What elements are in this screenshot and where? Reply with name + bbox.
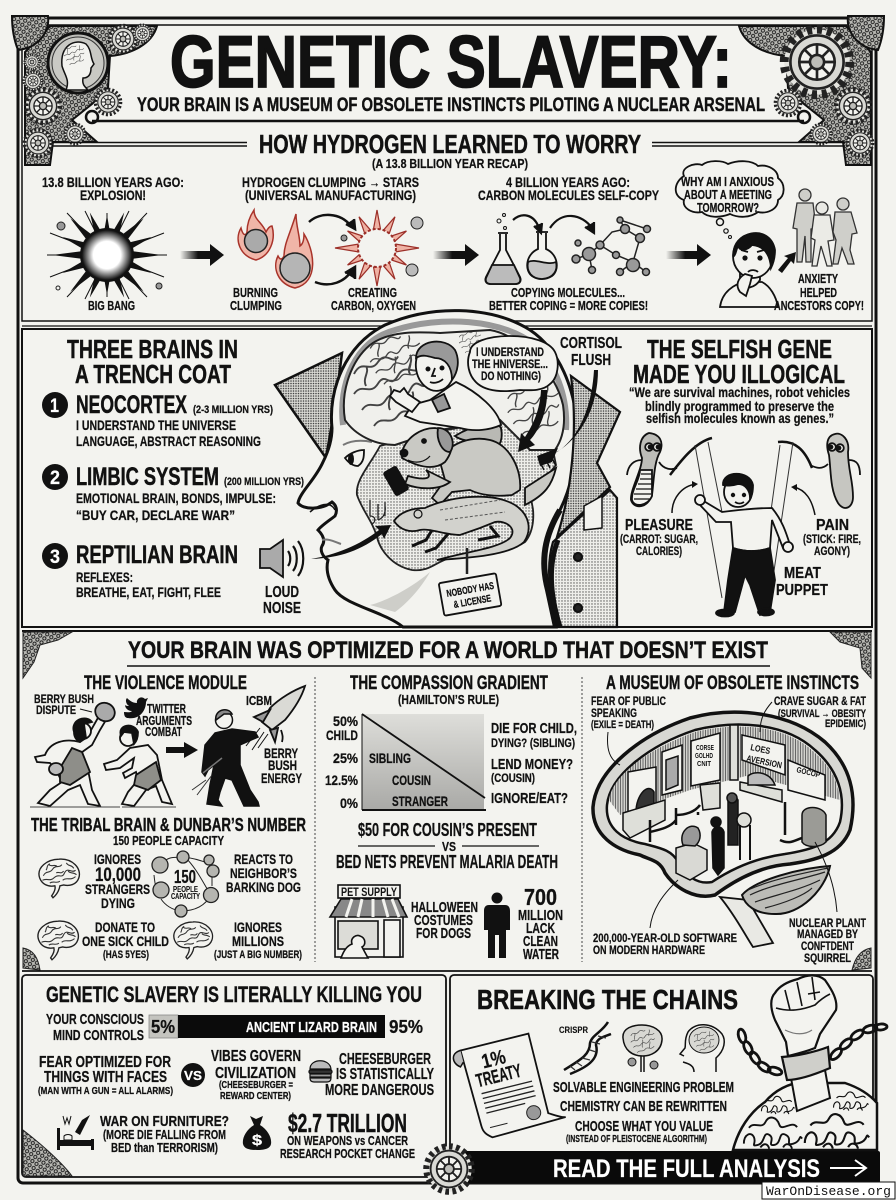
label: cortisol flush: CORTISOL	[560, 335, 622, 352]
exhibits	[623, 725, 826, 880]
label: pleasure: (CARROT: SUGAR,	[620, 532, 698, 546]
icon: molecule	[572, 217, 650, 276]
label: fear of public speaking: FEAR OF PUBLIC	[591, 694, 666, 708]
bar: 5 percent vs 95 percent: 5%	[151, 1017, 175, 1037]
text: vibes govern: (CHEESEBURGER =	[219, 1080, 293, 1091]
label: pain: AGONY)	[814, 544, 850, 558]
chart: compassion triangle: CHILD	[326, 727, 358, 743]
label: twitter: TWITTER	[147, 702, 186, 716]
ornament: top right corner cluster	[739, 16, 884, 165]
left coat collar	[275, 353, 342, 458]
icon: flasks	[485, 232, 557, 284]
quote: blindly programmed to preserve the	[645, 398, 834, 414]
icon: burning hydrogen clumps	[238, 210, 313, 288]
bar: 5 percent vs 95 percent: ANCIENT LIZARD BRAIN	[246, 1019, 377, 1036]
icon: brain	[38, 921, 78, 960]
stat: 700 million: CLEAN	[523, 933, 558, 950]
label: meat puppet	[776, 565, 828, 599]
speech bubble: THE HNIVERSE...	[472, 359, 548, 371]
arrow	[180, 244, 224, 266]
list item: limbic: “BUY CAR, DECLARE WAR”	[76, 507, 235, 523]
icon: bed	[57, 1115, 94, 1150]
label: pleasure	[620, 517, 698, 558]
icon: treaty scroll: 1%	[479, 1046, 508, 1073]
stat: 2.7 trillion: RESEARCH POCKET CHANGE	[280, 1146, 415, 1161]
icon: vs badge	[181, 1063, 205, 1087]
step: anxious thinker: HELPED	[800, 285, 837, 300]
text: fear optimized	[38, 1054, 173, 1097]
chart annotations: DYING? (SIBLING)	[491, 736, 575, 750]
list item: limbic: EMOTIONAL BRAIN, BONDS, IMPULSE:	[76, 490, 276, 506]
text: solutions: SOLVABLE ENGINEERING PROBLEM	[553, 1079, 734, 1096]
dog	[383, 428, 556, 505]
icon: vs badge: VS	[184, 1068, 202, 1083]
icon: speaker	[260, 540, 303, 617]
text: war on furniture: (MORE DIE FALLING FROM	[103, 1127, 226, 1142]
icon: head with brain	[680, 1025, 724, 1072]
speech bubble: DO NOTHING)	[481, 371, 541, 383]
step: stars: CLUMPING	[230, 298, 282, 313]
label: berry bush energy	[261, 746, 302, 786]
list item: reptilian: REFLEXES:	[76, 569, 133, 585]
stippled lower skull	[357, 420, 556, 570]
label: halloween costumes	[411, 899, 478, 942]
label: crave sugar and fat	[760, 694, 866, 732]
label: nuclear plant squirrel: CONFTDENT	[801, 939, 854, 953]
label: cortisol flush	[560, 335, 622, 369]
right worm	[778, 434, 860, 508]
exhibits: CORSE	[696, 745, 714, 752]
heading: GENETIC SLAVERY IS LITERALLY KILLING YOU	[46, 982, 422, 1007]
illustration: museum brain	[593, 712, 853, 947]
inner black arrow	[518, 390, 547, 452]
label: donate: DONATE TO	[95, 919, 155, 935]
label: nuclear plant squirrel	[789, 842, 867, 965]
icon: person silhouette	[484, 892, 510, 958]
chart: compassion triangle: 50%	[333, 713, 358, 729]
label: ignores millions: MILLIONS	[232, 933, 284, 949]
step: stars: CARBON, OXYGEN	[331, 298, 416, 313]
label: ignores millions: IGNORES	[234, 919, 282, 935]
label: fear of public speaking	[591, 694, 666, 765]
icon: ancestors	[793, 189, 857, 266]
cortisol arrow	[545, 370, 598, 458]
comparison text: VS	[442, 839, 456, 854]
list item: limbic: (200 MILLION YRS)	[224, 476, 304, 488]
visitors	[712, 827, 724, 875]
label: twitter: ARGUMENTS	[136, 714, 192, 728]
section: violence module	[30, 673, 305, 807]
list item: reptilian: REPTILIAN BRAIN	[76, 541, 238, 569]
ornament: top left corner cluster	[12, 16, 157, 165]
label: berry bush dispute: DISPUTE	[36, 703, 76, 717]
label: ignores strangers: 10,000	[95, 865, 141, 886]
text: vibes govern: VIBES GOVERN	[211, 1048, 301, 1065]
icon: medallion portrait	[48, 33, 108, 93]
head silhouette	[298, 311, 577, 627]
label: 200,000 year old software: ON MODERN HARDWARE	[593, 943, 705, 957]
icon: brain	[174, 922, 213, 959]
neocortex	[344, 330, 564, 450]
stat: 700 million: 700	[524, 884, 557, 910]
text: cheeseburger: MORE DANGEROUS	[325, 1082, 434, 1099]
chart: compassion triangle	[325, 713, 486, 811]
step: self copy	[478, 175, 659, 313]
watermark: WarOnDisease.org	[766, 1184, 891, 1199]
text: cheeseburger: CHEESEBURGER	[339, 1051, 431, 1068]
label: donate	[82, 919, 169, 961]
heading	[52, 131, 845, 171]
icon: curved arrows	[309, 215, 355, 284]
label: ignores millions	[214, 919, 302, 961]
list item: reptilian: BREATHE, EAT, FIGHT, FLEE	[76, 584, 221, 600]
label: reacts to neighbor	[226, 851, 301, 895]
step: anxious thinker	[676, 161, 864, 313]
label: twitter: COMBAT	[145, 725, 182, 739]
step: self copy: 4 BILLION YEARS AGO:	[506, 175, 630, 190]
icon: pet supply shop	[330, 885, 407, 958]
title: GENETIC SLAVERY:	[170, 22, 732, 103]
panel: world that doesn't exist	[22, 632, 895, 1199]
ornament: panel three corners	[23, 632, 871, 970]
speech bubble	[468, 336, 558, 391]
panel: breaking the chains	[426, 975, 887, 1192]
section: violence module: ICBM	[246, 694, 272, 708]
label: cortisol flush: FLUSH	[571, 352, 611, 369]
strings	[695, 442, 793, 598]
label: pleasure: CALORIES)	[636, 544, 682, 558]
column dividers	[315, 677, 582, 962]
text: solutions: CHOOSE WHAT YOU VALUE	[575, 1118, 713, 1135]
step: self copy: COPYING MOLECULES...	[511, 285, 625, 300]
thought bubble: WHY AM I ANXIOUS	[681, 175, 774, 189]
name badge: & LICENSE	[453, 593, 492, 611]
thought bubble: ABOUT A MEETING	[684, 188, 772, 202]
bar: 5 percent vs 95 percent: 95%	[389, 1017, 423, 1037]
chart: compassion triangle: 12.5%	[325, 772, 358, 788]
icon: crispr dna: CRISPR	[559, 1025, 588, 1036]
thought bubble	[676, 161, 784, 238]
heading: YOUR BRAIN WAS OPTIMIZED FOR A WORLD THAT DOESN’T EXIST	[128, 637, 768, 664]
small arrows	[672, 484, 815, 515]
heading: three brains: THREE BRAINS IN	[67, 334, 238, 364]
text: fear optimized: THINGS WITH FACES	[44, 1069, 167, 1086]
icon: speaker: LOUD	[265, 584, 299, 601]
icon: money bag: $	[252, 1132, 263, 1149]
panel: three brains	[22, 311, 872, 631]
label: berry bush energy: ENERGY	[261, 771, 302, 786]
name badge	[439, 548, 502, 616]
step: big bang: BIG BANG	[88, 298, 135, 313]
arrow to lizard	[311, 525, 391, 559]
comparison text	[336, 820, 558, 872]
step: stars: CREATING	[348, 285, 397, 300]
exhibits: GOLHD	[695, 753, 713, 760]
label: ignores strangers: IGNORES	[94, 851, 141, 867]
label: pain: (STICK: FIRE,	[803, 532, 861, 546]
thought bubble: TOMORROW?	[697, 201, 759, 215]
label: nuclear plant squirrel: NUCLEAR PLANT	[789, 916, 867, 930]
text: war on furniture: BED than TERRORISM)	[111, 1140, 218, 1155]
chart: compassion triangle: 0%	[340, 795, 358, 811]
panel frame	[22, 329, 872, 631]
cuff	[782, 1047, 830, 1080]
label: 200,000 year old software	[593, 880, 737, 957]
lizard	[394, 497, 529, 560]
list item: limbic: 2	[50, 468, 60, 489]
museum back wall	[609, 727, 840, 815]
label: reacts to neighbor: NEIGHBOR’S	[230, 865, 297, 881]
chart: compassion triangle: 25%	[333, 750, 358, 766]
panel: how hydrogen learned to worry	[42, 131, 864, 313]
icon: second caveman	[104, 726, 172, 806]
stat: 2.7 trillion	[280, 1108, 415, 1161]
illustration: gene worms and meat puppet	[627, 433, 860, 616]
rule above lower panels	[22, 970, 872, 972]
label: ignores strangers: STRANGERS	[85, 881, 150, 897]
bar: 5 percent vs 95 percent	[149, 1015, 423, 1038]
icon: anxious man	[720, 233, 778, 307]
step: stars: (UNIVERSAL MANUFACTURING)	[245, 188, 416, 203]
label: conscious mind: YOUR CONSCIOUS	[46, 1011, 144, 1028]
label: conscious mind	[46, 1011, 144, 1044]
exhibits: LOES	[750, 742, 771, 756]
label: nuclear plant squirrel: MANAGED BY	[797, 927, 858, 941]
name badge: NOBODY HAS	[446, 581, 495, 600]
arrow	[433, 244, 479, 266]
label: pleasure: PLEASURE	[625, 517, 693, 534]
step: big bang: EXPLOSION!	[80, 188, 146, 203]
label: pain	[803, 517, 861, 558]
illustration: fist breaking chains over brain	[733, 975, 887, 1150]
icon: brain	[39, 859, 79, 898]
step: self copy: BETTER COPING = MORE COPIES!	[489, 298, 648, 313]
heading: HOW HYDROGEN LEARNED TO WORRY	[259, 131, 641, 159]
icon: speaker: NOISE	[263, 600, 301, 617]
list item: reptilian: 3	[50, 547, 60, 568]
section: tribal brain	[31, 815, 306, 961]
chart annotations: IGNORE/EAT?	[491, 790, 568, 807]
list item: neocortex	[42, 391, 273, 449]
brain stem	[720, 897, 773, 947]
step: big bang	[42, 175, 184, 313]
chart annotations	[491, 720, 577, 807]
label: pain: PAIN	[816, 517, 849, 534]
label: meat puppet: PUPPET	[776, 582, 828, 599]
brain mound	[733, 1083, 877, 1150]
quote: selfish molecules known as genes.”	[646, 410, 834, 426]
section: compassion gradient	[325, 673, 577, 963]
list item: neocortex: (2-3 MILLION YRS)	[193, 404, 273, 416]
speech bubble: I UNDERSTAND	[476, 347, 544, 359]
illustration: head with three brains	[275, 311, 620, 627]
label: twitter	[124, 697, 192, 739]
section: violence module: THE VIOLENCE MODULE	[84, 673, 247, 694]
label: fear of public speaking: (EXILE = DEATH)	[591, 719, 654, 731]
label: ignores millions: (JUST A BIG NUMBER)	[214, 949, 302, 961]
ornament: lower left	[23, 1130, 72, 1176]
label: crave sugar and fat: EPIDEMIC)	[825, 718, 866, 730]
chart: compassion triangle: COUSIN	[392, 772, 431, 788]
label: berry bush energy: BUSH	[268, 758, 297, 773]
list item: neocortex: 1	[50, 396, 59, 417]
label: ignores strangers: DYING	[101, 895, 135, 911]
diagram: 150 people network	[152, 851, 219, 917]
label: 200,000 year old software: 200,000-YEAR-OLD SOFTWARE	[593, 931, 737, 945]
call to action bar	[457, 1151, 880, 1183]
chart: compassion triangle: STRANGER	[392, 793, 448, 809]
text: solutions	[553, 1079, 734, 1145]
chart annotations: (COUSIN)	[491, 771, 535, 785]
label: berry bush dispute	[34, 692, 94, 717]
icon: gear	[426, 1146, 472, 1192]
diagram: 150 people network: CAPACITY	[171, 892, 200, 901]
label: berry bush energy: BERRY	[264, 746, 298, 761]
label: donate: ONE SICK CHILD	[82, 933, 169, 949]
stat: 700 million	[518, 884, 563, 963]
chart annotations: LEND MONEY?	[491, 756, 573, 773]
label: halloween costumes: COSTUMES	[414, 912, 473, 929]
diagram: 150 people network: 150	[174, 867, 196, 887]
heading: three brains	[67, 334, 238, 389]
step: stars	[230, 175, 423, 313]
heading: (A 13.8 BILLION YEAR RECAP)	[372, 156, 528, 171]
right coat and collar	[549, 376, 620, 627]
text: fear optimized: FEAR OPTIMIZED FOR	[39, 1054, 171, 1071]
icon: treaty scroll: TREATY	[474, 1061, 524, 1092]
icon: arrows and bubbles	[497, 214, 594, 233]
frame	[450, 975, 873, 1177]
thick back of neck	[544, 510, 560, 627]
forearm	[791, 1070, 830, 1111]
section: compassion gradient: THE COMPASSION GRADIENT	[350, 673, 548, 694]
section: tribal brain: THE TRIBAL BRAIN & DUNBAR’S NUMBER	[31, 815, 306, 835]
list item: reptilian	[42, 541, 238, 600]
diagram: 150 people network: PEOPLE	[173, 885, 199, 894]
arrow up	[778, 252, 796, 273]
text: vibes govern	[211, 1048, 301, 1102]
icon: money bag	[243, 1116, 271, 1150]
list item: limbic: LIMBIC SYSTEM	[76, 463, 219, 491]
text: cheeseburger	[325, 1051, 434, 1099]
stat: 700 million: LACK	[526, 920, 555, 937]
label: berry bush dispute: BERRY BUSH	[34, 692, 94, 706]
step: stars: HYDROGEN CLUMPING → STARS	[242, 175, 419, 190]
rule below title	[92, 120, 804, 122]
call to action bar: READ THE FULL ANALYSIS	[553, 1155, 820, 1183]
list item: neocortex: NEOCORTEX	[76, 391, 187, 419]
exhibits: CNIT	[697, 761, 712, 768]
list item: neocortex: LANGUAGE, ABSTRACT REASONING	[76, 433, 261, 449]
plinth with bust	[676, 843, 707, 880]
stat: 2.7 trillion: $2.7 TRILLION	[288, 1108, 407, 1138]
icon: big bang explosion	[47, 210, 167, 300]
label: halloween costumes: FOR DOGS	[416, 925, 471, 942]
stat: 700 million: WATER	[523, 946, 559, 963]
list item: limbic	[42, 463, 304, 523]
label: meat puppet: MEAT	[784, 565, 821, 582]
puppet	[695, 474, 793, 616]
step: self copy: CARBON MOLECULES SELF-COPY	[478, 188, 659, 203]
chart annotations: DIE FOR CHILD,	[491, 720, 577, 737]
text: war on furniture: WAR ON FURNITURE?	[100, 1113, 229, 1130]
label: nuclear plant squirrel: SQUIRREL	[804, 951, 851, 965]
exhibits: AVERSION	[746, 753, 783, 770]
chart: compassion triangle: SIBLING	[369, 750, 411, 766]
comparison text: $50 FOR COUSIN’S PRESENT	[358, 820, 537, 840]
man on top	[390, 340, 502, 460]
arrow	[166, 742, 198, 758]
icon: rocket	[246, 686, 305, 750]
icon: pet supply shop: PET SUPPLY	[341, 887, 397, 899]
section: museum of obsolete instincts	[591, 673, 867, 965]
brain shell	[593, 712, 853, 896]
exhibits: GOCOP	[796, 765, 821, 780]
heading: selfish gene	[633, 334, 845, 389]
heading: selfish gene: THE SELFISH GENE	[647, 334, 832, 364]
comparison text: BED NETS PREVENT MALARIA DEATH	[336, 852, 558, 872]
section: tribal brain: 150 PEOPLE CAPACITY	[113, 833, 224, 848]
icon: brain tree	[623, 1025, 662, 1072]
icon: cheeseburger	[309, 1061, 332, 1082]
text: war on furniture	[100, 1113, 229, 1155]
step: stars: BURNING	[233, 285, 278, 300]
label: ignores strangers	[85, 851, 150, 911]
text: vibes govern: REWARD CENTER)	[220, 1091, 291, 1102]
heading: three brains: A TRENCH COAT	[75, 359, 231, 389]
icon: caveman with rock	[35, 699, 118, 806]
cerebellum	[742, 866, 830, 914]
label: donate: (HAS 5YES)	[103, 949, 149, 961]
text: solutions: CHEMISTRY CAN BE REWRITTEN	[560, 1098, 727, 1115]
label: fear of public speaking: SPEAKING	[591, 706, 637, 720]
text: fear optimized: (MAN WITH A GUN = ALL ALARMS)	[38, 1086, 173, 1097]
step: anxious thinker: ANXIETY	[798, 271, 838, 286]
label: conscious mind: MIND CONTROLS	[53, 1027, 144, 1044]
icon: treaty scroll	[452, 1030, 566, 1142]
icon: suit man	[192, 710, 259, 806]
label: crave sugar and fat: CRAVE SUGAR & FAT	[774, 694, 866, 708]
stat: 700 million: MILLION	[518, 907, 563, 924]
quote	[629, 384, 850, 426]
label: reacts to neighbor: REACTS TO	[234, 851, 293, 867]
music notes	[370, 500, 385, 524]
heading: BREAKING THE CHAINS	[477, 984, 738, 1015]
label: halloween costumes: HALLOWEEN	[411, 899, 478, 916]
stat: 2.7 trillion: ON WEAPONS vs CANCER	[287, 1133, 408, 1148]
text: cheeseburger: IS STATISTICALLY	[336, 1066, 434, 1083]
text: solutions: (INSTEAD OF PLEISTOCENE ALGORITHM)	[566, 1133, 707, 1145]
step: big bang: 13.8 BILLION YEARS AGO:	[42, 175, 184, 190]
nuclear plant	[802, 808, 826, 846]
chains	[737, 1023, 887, 1076]
list item: neocortex: I UNDERSTAND THE UNIVERSE	[76, 417, 236, 433]
fist	[771, 975, 836, 1056]
arrow	[666, 244, 711, 266]
text: vibes govern: CIVILIZATION	[215, 1065, 296, 1082]
panel: genetic slavery is killing you	[22, 975, 446, 1177]
label: reacts to neighbor: BARKING DOG	[226, 879, 301, 895]
icon: crispr dna	[559, 1022, 611, 1074]
left worm	[627, 433, 712, 506]
icon: exploding star	[335, 210, 423, 286]
section: compassion gradient: (HAMILTON’S RULE)	[398, 692, 499, 707]
frame	[22, 975, 446, 1177]
